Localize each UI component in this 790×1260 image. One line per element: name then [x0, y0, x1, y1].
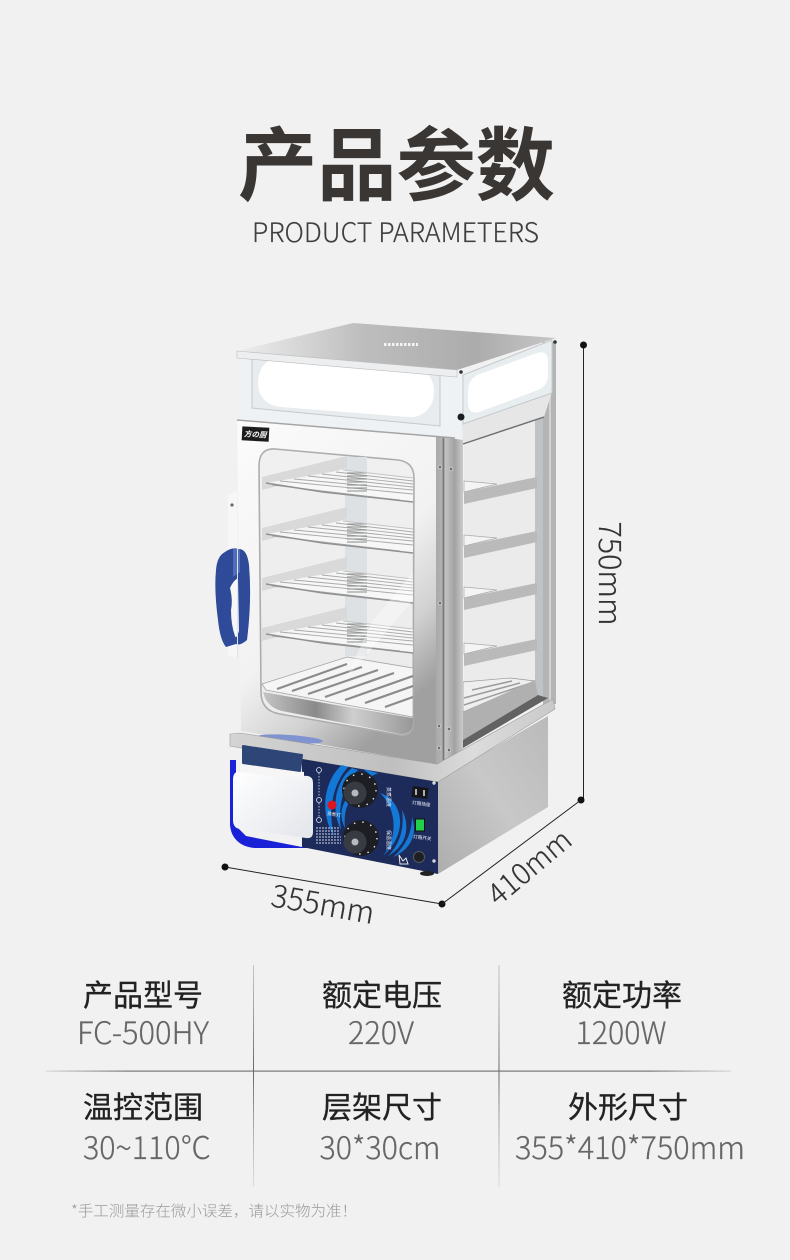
upper side frame — [458, 392, 552, 444]
small white mark — [399, 855, 408, 864]
cell: overall size: 外形尺寸 — [568, 1083, 688, 1127]
panel screws — [432, 781, 436, 863]
back right column — [535, 342, 556, 704]
title: 产品参数 — [238, 102, 555, 218]
blue swooshes — [325, 765, 414, 857]
panel labels: 保温温度 — [385, 830, 392, 850]
cell: model: 产品型号 — [83, 971, 203, 1015]
cell: rated power: 1200W — [576, 1008, 666, 1053]
blue glow under door — [257, 733, 323, 745]
lower knob — [343, 820, 379, 856]
bottom reflective tray — [263, 692, 413, 734]
control panel — [302, 759, 438, 874]
cell: shelf size — [320, 1083, 442, 1168]
cell: temperature range — [83, 1083, 211, 1168]
light box front frame — [237, 352, 463, 444]
dimension: height 750mm: 750mm — [590, 521, 634, 626]
door hinge column — [435, 436, 463, 765]
cell: rated voltage — [322, 971, 442, 1053]
base side panel — [438, 716, 548, 874]
panel labels: 蒸煮灯 — [327, 810, 342, 819]
cell: overall size: 355*410*750mm — [515, 1123, 745, 1168]
socket — [411, 786, 429, 799]
right side glass panel — [464, 418, 536, 730]
panel labels: 灯箱插座 — [412, 799, 431, 809]
cell: shelf size: 层架尺寸 — [322, 1083, 442, 1127]
centre rear column — [345, 457, 367, 656]
top lid — [237, 323, 557, 420]
base ledge — [230, 699, 555, 782]
blue side strip — [230, 760, 307, 848]
cell: rated voltage: 220V — [348, 1008, 414, 1053]
red indicator light — [328, 800, 336, 810]
panel indicator scale — [316, 768, 322, 822]
glass reflection — [345, 572, 413, 680]
panel labels: 灯箱开关 — [413, 833, 432, 843]
cell: temperature range: 温控范围 — [83, 1083, 203, 1127]
round port — [414, 852, 424, 862]
brand logo — [242, 426, 269, 442]
hinge screws — [437, 465, 460, 764]
dimension: width 355mm — [222, 864, 446, 933]
cell: temperature range: 30~110℃ — [83, 1123, 211, 1168]
cell: rated power — [562, 971, 682, 1053]
door handle bracket — [228, 491, 238, 658]
light box front window — [252, 355, 440, 426]
dimension: height 750mm — [578, 342, 634, 804]
brand logo: 方の厨 — [244, 428, 268, 441]
door frame — [237, 419, 436, 764]
dimension: width 355mm: 355mm — [268, 871, 378, 933]
cell: model: FC-500HY — [77, 1008, 209, 1053]
side shelf rails — [463, 477, 548, 748]
footnote: *手工测量存在微小误差，请以实物为准！ — [71, 1200, 357, 1221]
cell: shelf size: 30*30cm — [320, 1123, 440, 1168]
panel labels — [327, 787, 432, 850]
dimension: depth 410mm: 410mm — [477, 818, 580, 914]
water tank — [233, 746, 313, 838]
parameter table — [46, 965, 745, 1187]
green switch — [416, 819, 424, 831]
upper knob — [342, 772, 378, 808]
tank lid — [243, 746, 302, 771]
cell: rated power: 额定功率 — [562, 971, 682, 1015]
light box side window — [463, 340, 552, 424]
upper side dark edge — [463, 417, 544, 444]
dimension: depth 410mm — [442, 800, 581, 914]
subtitle: PRODUCT PARAMETERS — [252, 211, 539, 250]
panel labels: 蒸煮温度 — [385, 787, 392, 807]
cell: overall size — [515, 1083, 745, 1168]
panel instruction block — [316, 828, 341, 843]
door glass window with shelves — [259, 449, 414, 735]
cell: model — [77, 971, 209, 1053]
cell: rated voltage: 额定电压 — [322, 971, 442, 1015]
wire shelves — [262, 456, 413, 717]
table grid lines — [46, 965, 731, 1187]
cabinet foot — [420, 871, 434, 876]
blue door handle — [215, 548, 250, 658]
product illustration: steamer cabinet — [215, 323, 557, 876]
door top seam — [237, 420, 455, 438]
